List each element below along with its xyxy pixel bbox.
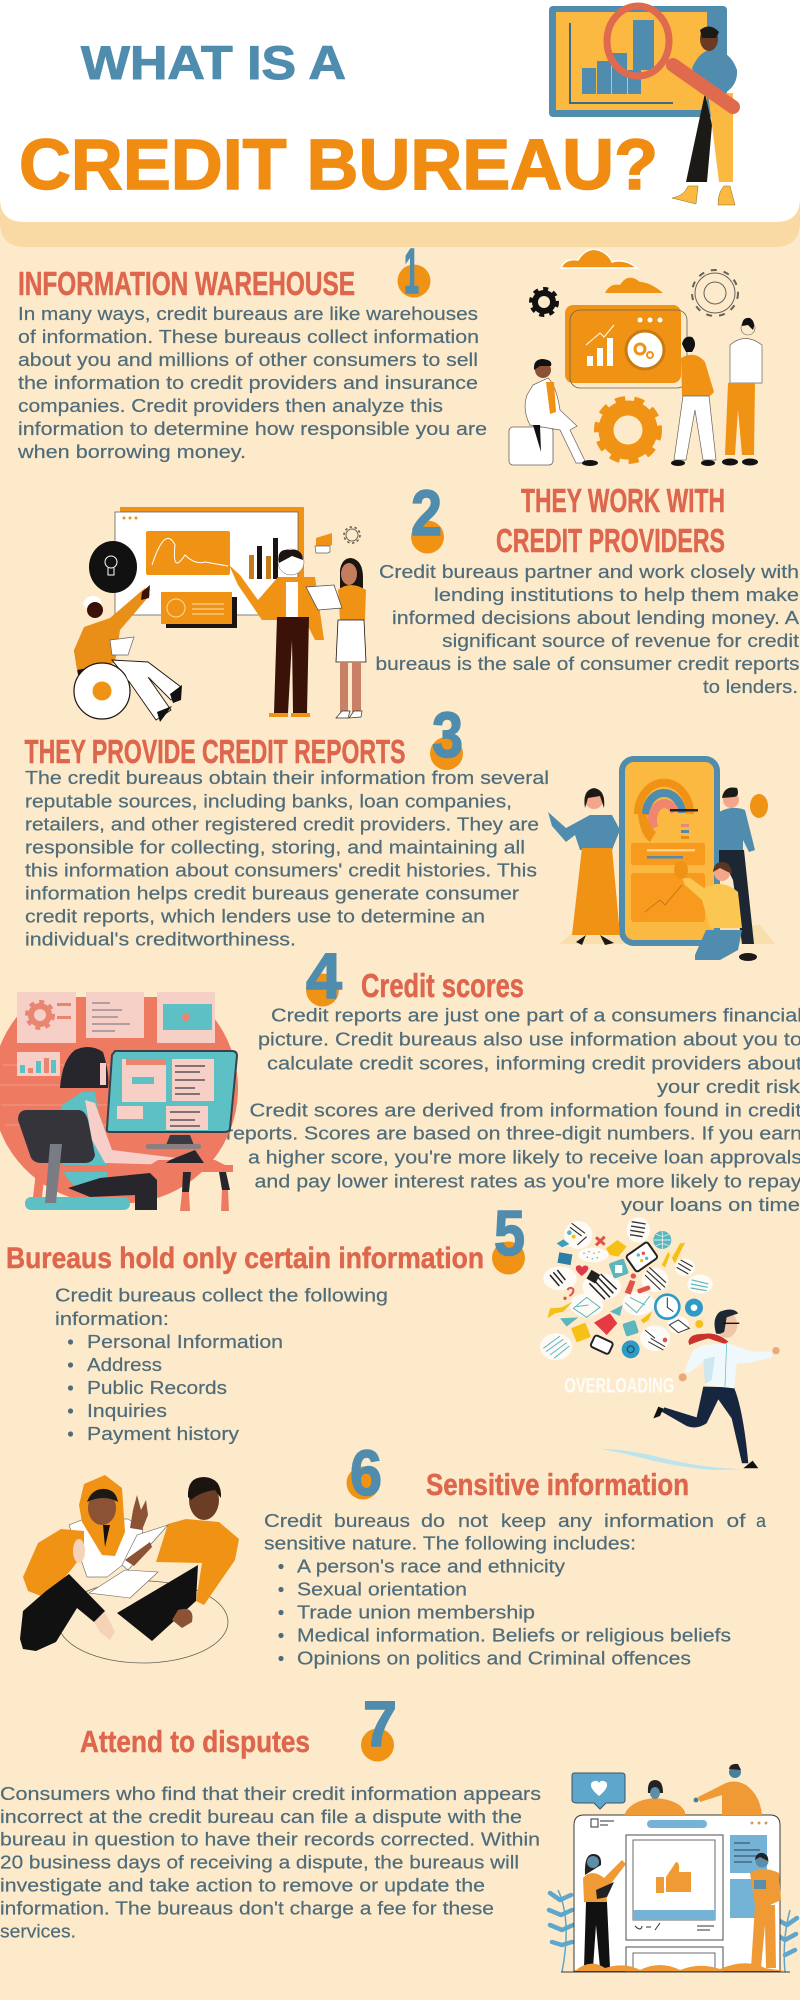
- panel: attend to disputes: [0, 1688, 797, 1972]
- illustration: presentation board with three people: [74, 507, 366, 722]
- illustration: social media post with people: [549, 1764, 797, 1972]
- text block: partnership with lenders: [376, 561, 800, 697]
- number 1: 1: [404, 235, 419, 307]
- text block: partnership with lenders: lending institutions to help them make: [434, 584, 799, 605]
- list: collected information: Public Records: [87, 1377, 227, 1398]
- list: collected information: Personal Information: [87, 1331, 283, 1352]
- text block: credit score explanation: your credit risk: [657, 1076, 800, 1097]
- list: sensitive information: Sexual orientation: [297, 1578, 467, 1600]
- text block: credit score explanation: and pay lower interest rates as you're more likely to repay: [254, 1170, 800, 1192]
- text block: sensitive data introduction: sensitive nature. The following includes:: [264, 1532, 636, 1554]
- text block: partnership with lenders: bureaus is the sale of consumer credit reports: [376, 653, 800, 674]
- panel: bureaus hold only certain information: [6, 1197, 780, 1470]
- list: collected information: Inquiries: [87, 1400, 167, 1421]
- text block: sources of information: reputable sources, including banks, loan companies,: [25, 790, 512, 812]
- text block: warehouse explanation: [17, 303, 487, 462]
- panel: work with credit providers: [74, 477, 800, 722]
- text block: disputes explanation: 20 business days of receiving a dispute, the bureaus will: [0, 1852, 519, 1872]
- heading: credit scores: Credit scores: [361, 967, 524, 1004]
- text block: warehouse explanation: of information. These bureaus collect information: [18, 326, 479, 347]
- text block: credit score explanation: picture. Credit bureaus also use information about you to: [258, 1028, 800, 1050]
- panel: information warehouse: [17, 235, 762, 466]
- text block: sensitive data introduction: [264, 1510, 767, 1554]
- header banner: [0, 0, 800, 247]
- text block: sources of information: The credit bureaus obtain their information from several: [25, 767, 549, 788]
- number 4: 4: [306, 940, 342, 1012]
- text block: disputes explanation: Consumers who find that their credit information appears: [0, 1783, 541, 1804]
- text block: sources of information: credit reports, which lenders use to determine an: [25, 906, 485, 926]
- text block: sensitive data introduction: information: [604, 1510, 714, 1531]
- text block: disputes explanation: information. The bureaus don't charge a fee for these: [0, 1898, 494, 1918]
- heading: sensitive information: Sensitive information: [426, 1467, 689, 1502]
- text block: sources of information: [25, 767, 549, 950]
- text block: sensitive data introduction: bureaus: [334, 1510, 410, 1531]
- text block: sources of information: this information about consumers' credit histories. This: [25, 860, 537, 880]
- text block: sources of information: retailers, and other registered credit providers. They are: [25, 814, 539, 834]
- text block: credit score explanation: calculate credit scores, informing credit providers about: [267, 1052, 800, 1074]
- text block: disputes explanation: [0, 1783, 541, 1942]
- text block: disputes explanation: services.: [0, 1920, 76, 1942]
- list: sensitive information: Opinions on politics and Criminal offences: [297, 1648, 691, 1668]
- number 6: 6: [350, 1437, 382, 1509]
- panel: sensitive information: [20, 1437, 767, 1668]
- illustration: team with dashboard and gears: [509, 249, 762, 466]
- text block: partnership with lenders: Credit bureaus partner and work closely with: [379, 561, 799, 582]
- text block: disputes explanation: incorrect at the credit bureau can file a dispute with the: [0, 1806, 522, 1827]
- text block: warehouse explanation: In many ways, credit bureaus are like warehouses: [18, 303, 478, 324]
- text block: warehouse explanation: companies. Credit providers then analyze this: [18, 395, 443, 416]
- heading: they provide credit reports: THEY PROVIDE CREDIT REPORTS: [24, 733, 406, 770]
- text block: sensitive data introduction: of: [726, 1510, 747, 1531]
- text block: information collected: information:: [55, 1308, 169, 1329]
- list: collected information: Payment history: [87, 1423, 240, 1444]
- heading: information warehouse: INFORMATION WAREHOUSE: [18, 265, 355, 302]
- number 1: [398, 235, 430, 307]
- panel: credit scores: [0, 940, 800, 1215]
- title: credit bureau: CREDIT BUREAU?: [19, 126, 658, 205]
- list: sensitive information: [278, 1556, 731, 1668]
- text block: sources of information: individual's creditworthiness.: [25, 928, 296, 950]
- text block: sensitive data introduction: keep: [501, 1510, 546, 1531]
- text block: credit score explanation: reports. Scores are based on three-digit numbers. If you earn: [226, 1122, 800, 1144]
- text block: partnership with lenders: significant source of revenue for credit: [442, 630, 799, 651]
- illustration: woman at computer: [0, 992, 238, 1211]
- heading: attend to disputes: Attend to disputes: [80, 1724, 310, 1759]
- text block: credit score explanation: Credit reports are just one part of a consumers financial: [271, 1004, 800, 1026]
- text block: warehouse explanation: when borrowing money.: [17, 441, 246, 462]
- text block: partnership with lenders: to lenders.: [703, 676, 798, 697]
- text block: sensitive data introduction: Credit: [264, 1510, 322, 1531]
- text block: credit score explanation: a higher score, you're more likely to receive loan approvals: [248, 1146, 800, 1168]
- number 5: 5: [494, 1197, 525, 1269]
- text block: sources of information: information helps credit bureaus generate consumer: [25, 882, 519, 904]
- list: collected information: [68, 1331, 283, 1444]
- text block: sensitive data introduction: not: [458, 1510, 488, 1531]
- text block: sensitive data introduction: do: [421, 1510, 445, 1531]
- number 7: 7: [363, 1688, 397, 1760]
- list: sensitive information: Medical information. Beliefs or religious beliefs: [297, 1624, 731, 1646]
- list: collected information: Address: [87, 1354, 162, 1375]
- text block: partnership with lenders: informed decisions about lending money. A: [392, 607, 800, 628]
- list: sensitive information: Trade union membership: [297, 1602, 535, 1622]
- text block: disputes explanation: investigate and take action to remove or update the: [0, 1874, 485, 1896]
- heading: they work with credit providers: [496, 482, 725, 559]
- text block: credit score explanation: Credit scores are derived from information found in credit: [250, 1100, 800, 1120]
- illustration: man with magnifier and bar chart: [549, 6, 737, 205]
- overloading caption: OVERLOADING: [564, 1374, 674, 1398]
- text block: sensitive data introduction: any: [558, 1510, 593, 1531]
- text block: warehouse explanation: about you and millions of other consumers to sell: [18, 349, 478, 370]
- number 3: 3: [432, 699, 463, 771]
- illustration: phone with credit gauge and people: [548, 759, 775, 961]
- text block: warehouse explanation: information to determine how responsible you are: [18, 418, 487, 439]
- list: sensitive information: A person's race and ethnicity: [297, 1556, 566, 1576]
- number 2: 2: [411, 477, 442, 549]
- heading: bureaus hold only certain information: Bureaus hold only certain information: [6, 1242, 484, 1275]
- panel: they provide credit reports: [24, 699, 775, 961]
- title: what is a: WHAT IS A: [81, 36, 346, 89]
- illustration: three people meeting around laptop: [20, 1475, 239, 1663]
- text block: information collected: [55, 1284, 388, 1329]
- text block: disputes explanation: bureau in question to have their records corrected. Within: [0, 1828, 540, 1850]
- text block: sources of information: responsible for collecting, storing, and maintaining all: [25, 836, 525, 858]
- text block: warehouse explanation: the information to credit providers and insurance: [18, 372, 478, 393]
- illustration: overloaded man running from icons: [540, 1217, 780, 1470]
- text block: information collected: Credit bureaus collect the following: [55, 1284, 388, 1306]
- text block: credit score explanation: [226, 1004, 800, 1215]
- text block: credit score explanation: your loans on time: [621, 1194, 800, 1215]
- text block: sensitive data introduction: a: [756, 1510, 767, 1531]
